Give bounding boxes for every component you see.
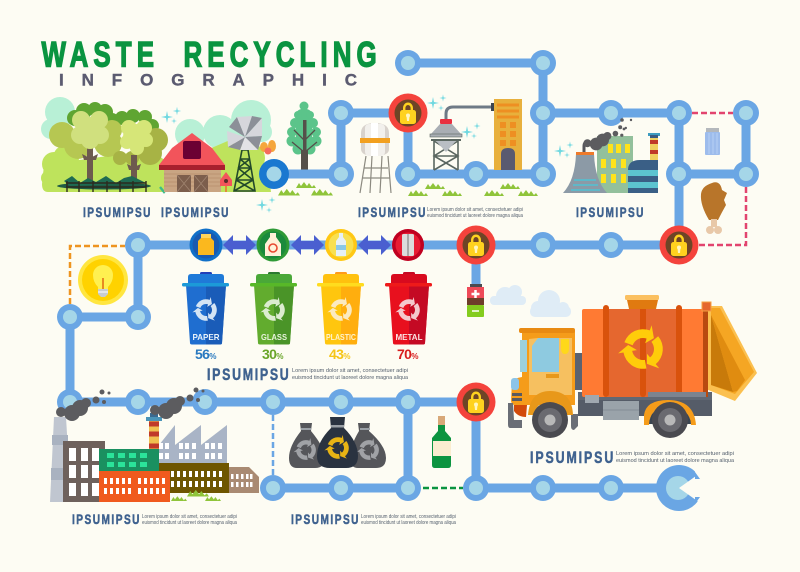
subtitle: INFOGRAPHIC (59, 70, 357, 90)
text block: tower caption: euismod tincidunt ut laoreet dolore magna aliqua (427, 213, 523, 219)
illustration: power plant (563, 118, 660, 193)
bin: glass: GLASS (261, 332, 287, 342)
illustration: garbage truck (508, 295, 757, 438)
percentages: 43% (329, 346, 350, 362)
arrows between categories (223, 235, 391, 255)
title: WASTE (42, 35, 154, 74)
illustration: farm (41, 97, 272, 192)
icon: jar (705, 128, 720, 155)
dashed connectors (70, 113, 746, 488)
grass patches (278, 182, 538, 196)
icon: battery (467, 284, 484, 317)
clouds (490, 285, 571, 317)
icon: light bulb (78, 255, 128, 305)
start node (259, 159, 289, 189)
text block: bags caption (361, 514, 456, 526)
end node (656, 465, 703, 511)
text block: truck caption (616, 451, 734, 464)
labels row 1: IPSUMIPSU (576, 205, 644, 220)
factory label: IPSUMIPSU (72, 512, 140, 527)
text block: factory caption (142, 514, 237, 526)
labels row 1 (83, 205, 644, 220)
pipeline (70, 63, 746, 488)
title (42, 35, 377, 74)
truck container (582, 295, 711, 397)
icon: garbage bags (289, 417, 386, 468)
bin: plastic (317, 272, 364, 344)
icon: plastic category (325, 229, 357, 261)
text block: tower caption (427, 207, 523, 219)
truck chassis details (585, 392, 706, 420)
sparkles (161, 94, 574, 213)
bin: plastic: PLASTIC (326, 332, 356, 342)
text block: factory caption: Lorem ipsum dolor sit amet, consectetuer adipi (142, 514, 237, 520)
icon: tree (286, 102, 322, 170)
bin: paper: PAPER (192, 332, 220, 342)
truck chassis (578, 392, 712, 416)
text block: bags caption: euismod tincidunt ut laoreet dolore magna aliqua (361, 520, 456, 526)
bin: paper (182, 272, 229, 344)
text block: bins caption: Lorem ipsum dolor sit amet, consectetuer adipi (292, 368, 408, 374)
icon: butterfly (260, 140, 276, 154)
text block: bins caption (292, 368, 408, 381)
bins label: IPSUMIPSU (207, 366, 289, 385)
text block: tower caption: Lorem ipsum dolor sit amet, consectetuer adipi (427, 207, 523, 213)
category icons (190, 228, 424, 262)
text block: truck caption: Lorem ipsum dolor sit amet, consectetuer adipi (616, 451, 734, 457)
text block: bins caption: euismod tincidunt ut laoreet dolore magna aliqua (292, 375, 408, 381)
labels row 1: IPSUMIPSU (83, 205, 151, 220)
text block: bags caption: Lorem ipsum dolor sit amet, consectetuer adipi (361, 514, 456, 520)
icon: glass category (256, 228, 290, 262)
truck tailgate (705, 306, 757, 401)
truck wheels (528, 391, 696, 438)
percentages: 30% (262, 346, 283, 362)
labels row 1: IPSUMIPSU (161, 205, 229, 220)
icon: windmill (227, 116, 262, 191)
illustration: water tower (360, 123, 391, 193)
lock icons (388, 94, 698, 422)
percentages: 56% (195, 346, 216, 362)
truck label: IPSUMIPSU (530, 449, 613, 468)
icon: paper category (190, 228, 222, 262)
text block: truck caption: euismod tincidunt ut laoreet dolore magna aliqua (616, 458, 734, 464)
bags label: IPSUMIPSU (291, 512, 359, 527)
bin: metal: METAL (396, 332, 422, 342)
percentages (195, 346, 418, 362)
icon: green bottle (432, 416, 451, 468)
percentages: 70% (397, 346, 418, 362)
smoke clouds (56, 388, 204, 421)
bin: metal (385, 272, 432, 344)
text block: factory caption: euismod tincidunt ut laoreet dolore magna aliqua (142, 520, 237, 526)
labels row 1: IPSUMIPSU (358, 205, 426, 220)
illustration: industrial tower and building (430, 99, 522, 170)
icon: metal category (392, 229, 424, 261)
bin: glass (250, 272, 297, 344)
pipeline nodes (57, 50, 759, 501)
icon: chicken drumstick (701, 182, 727, 234)
title: RECYCLING (184, 35, 377, 74)
illustration: factory (50, 413, 259, 502)
truck cab (508, 328, 582, 430)
